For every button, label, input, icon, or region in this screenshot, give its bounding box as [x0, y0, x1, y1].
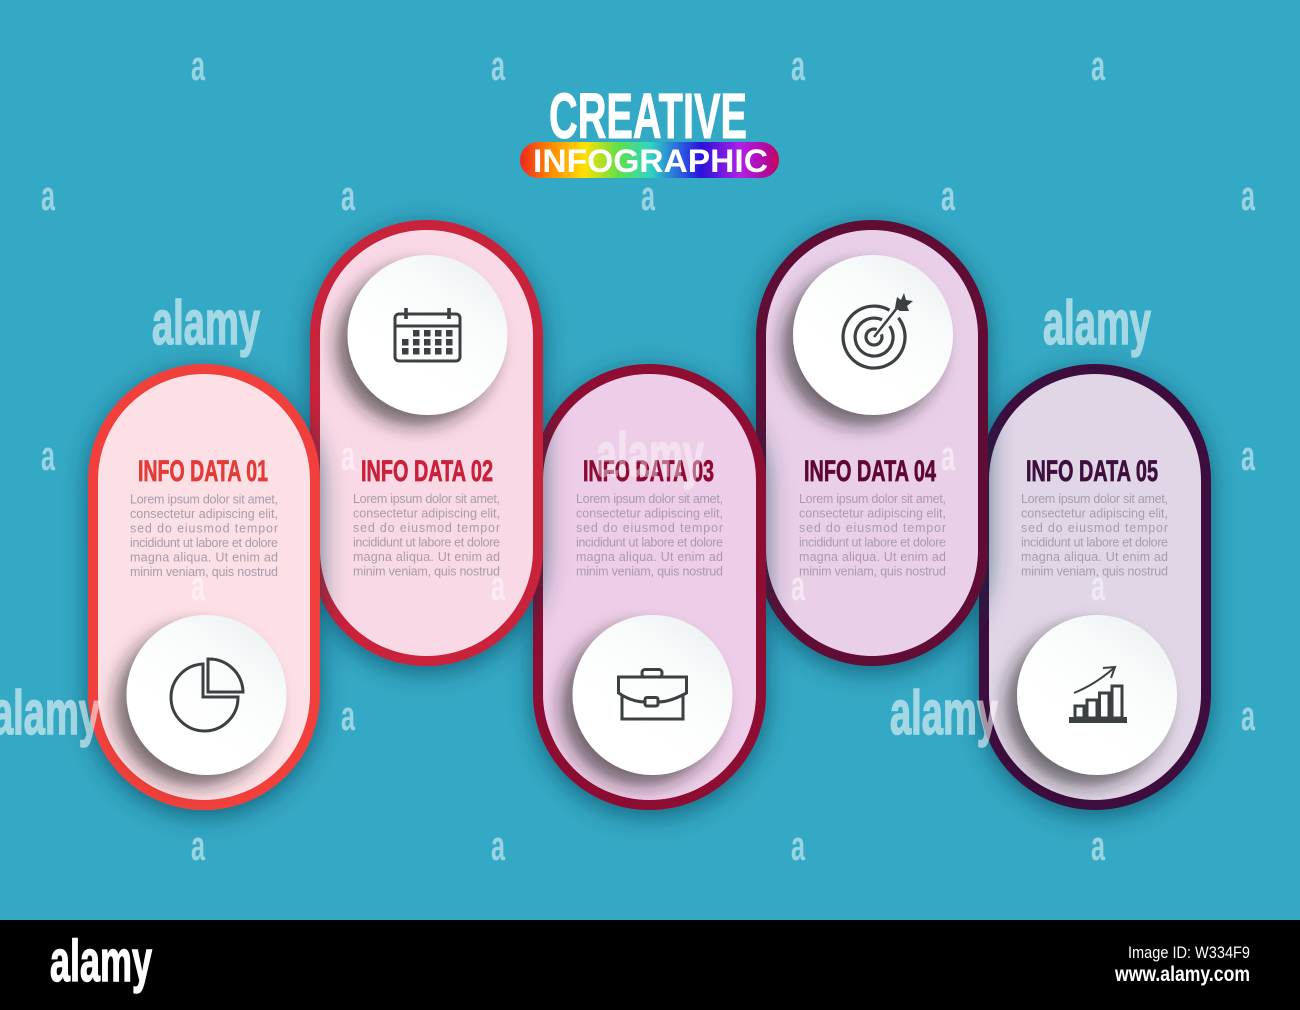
body text 03: Lorem ipsum dolor sit amet,: [576, 492, 723, 506]
body text 05: [1021, 492, 1168, 578]
body text 03: minim veniam, quis nostrud: [576, 564, 723, 578]
body text 05: incididunt ut labore et dolore: [1021, 536, 1168, 550]
body text 04: [799, 492, 946, 578]
icon disc 04: [793, 255, 953, 415]
watermarks: a: [791, 562, 805, 609]
panel: info data 05: [984, 369, 1206, 805]
heading 05: INFO DATA 05: [1026, 455, 1158, 488]
website: www.alamy.com: [1114, 963, 1250, 986]
body text 02: Lorem ipsum dolor sit amet,: [353, 492, 500, 506]
body text 02: sed do eiusmod tempor: [353, 521, 500, 535]
watermarks: a: [341, 692, 355, 739]
watermarks: alamy: [890, 679, 998, 748]
icon disc 01: [126, 615, 286, 775]
watermarks: a: [191, 822, 205, 869]
body text 01: magna aliqua. Ut enim ad: [130, 550, 278, 564]
icon: target with arrow: [843, 293, 913, 368]
body text 04: incididunt ut labore et dolore: [799, 536, 946, 550]
body text 03: consectetur adipiscing elit,: [576, 506, 723, 520]
heading 02: INFO DATA 02: [361, 455, 493, 488]
icon: growth chart: [1070, 667, 1126, 722]
body text 04: magna aliqua. Ut enim ad: [799, 550, 946, 564]
body text 04: sed do eiusmod tempor: [799, 521, 946, 535]
watermarks: a: [1091, 42, 1105, 89]
body text 04: Lorem ipsum dolor sit amet,: [799, 492, 946, 506]
watermarks: alamy: [596, 421, 704, 490]
watermarks: a: [491, 42, 505, 89]
title line: infographic: INFOGRAPHIC: [533, 143, 768, 179]
watermarks: [0, 42, 1255, 869]
watermarks: a: [341, 432, 355, 479]
watermarks: a: [1091, 822, 1105, 869]
body text 03: magna aliqua. Ut enim ad: [576, 550, 723, 564]
body text 01: minim veniam, quis nostrud: [130, 565, 278, 579]
panel: info data 02: [315, 225, 538, 661]
icon disc 05: [1017, 615, 1177, 775]
panel: info data 03: [538, 369, 761, 805]
body text 05: minim veniam, quis nostrud: [1021, 564, 1168, 578]
title line: creative: CREATIVE: [549, 80, 747, 152]
body text 01: sed do eiusmod tempor: [130, 522, 278, 536]
body text 05: sed do eiusmod tempor: [1021, 521, 1168, 535]
heading 01: INFO DATA 01: [138, 455, 268, 488]
heading 04: INFO DATA 04: [804, 455, 936, 488]
watermarks: a: [641, 172, 655, 219]
watermarks: a: [341, 172, 355, 219]
icon disc 02: [348, 255, 508, 415]
body text 05: Lorem ipsum dolor sit amet,: [1021, 492, 1168, 506]
watermarks: a: [791, 822, 805, 869]
footer logo: alamy: [50, 929, 152, 994]
watermarks: a: [191, 42, 205, 89]
watermarks: a: [491, 562, 505, 609]
body text 01: incididunt ut labore et dolore: [130, 536, 278, 550]
body text 02: magna aliqua. Ut enim ad: [353, 550, 500, 564]
watermarks: a: [791, 42, 805, 89]
body text 01: Lorem ipsum dolor sit amet,: [130, 492, 278, 506]
body text 03: [576, 492, 723, 578]
body text 03: sed do eiusmod tempor: [576, 521, 723, 535]
icon disc 03: [572, 615, 732, 775]
body text 04: minim veniam, quis nostrud: [799, 564, 946, 578]
body text 02: minim veniam, quis nostrud: [353, 564, 500, 578]
image id: Image ID: W334F9: [1128, 943, 1250, 962]
body text 03: incididunt ut labore et dolore: [576, 536, 723, 550]
body text 01: [130, 492, 278, 579]
body text 02: incididunt ut labore et dolore: [353, 536, 500, 550]
heading 03: INFO DATA 03: [583, 455, 714, 488]
rainbow pill: [520, 142, 779, 178]
body text 02: [353, 492, 500, 578]
watermarks: alamy: [152, 289, 260, 358]
body text 05: magna aliqua. Ut enim ad: [1021, 550, 1168, 564]
icon: briefcase: [618, 670, 686, 719]
panel: info data 01: [93, 369, 315, 805]
watermarks: a: [191, 562, 205, 609]
body text 02: consectetur adipiscing elit,: [353, 506, 500, 520]
watermarks: a: [1241, 692, 1255, 739]
watermarks: a: [491, 822, 505, 869]
icon: calendar: [395, 308, 460, 361]
icon: pie chart: [171, 659, 243, 731]
body text 05: consectetur adipiscing elit,: [1021, 506, 1168, 520]
watermarks: a: [41, 172, 55, 219]
watermarks: alamy: [1043, 289, 1151, 358]
body text 01: consectetur adipiscing elit,: [130, 507, 278, 521]
panel: info data 04: [761, 225, 983, 661]
watermarks: a: [1241, 432, 1255, 479]
watermarks: a: [41, 432, 55, 479]
body text 04: consectetur adipiscing elit,: [799, 506, 946, 520]
footer bar: [0, 920, 1300, 1010]
title: [520, 80, 779, 179]
watermarks: a: [1091, 562, 1105, 609]
watermarks: a: [1241, 172, 1255, 219]
watermarks: a: [941, 432, 955, 479]
watermarks: a: [941, 172, 955, 219]
